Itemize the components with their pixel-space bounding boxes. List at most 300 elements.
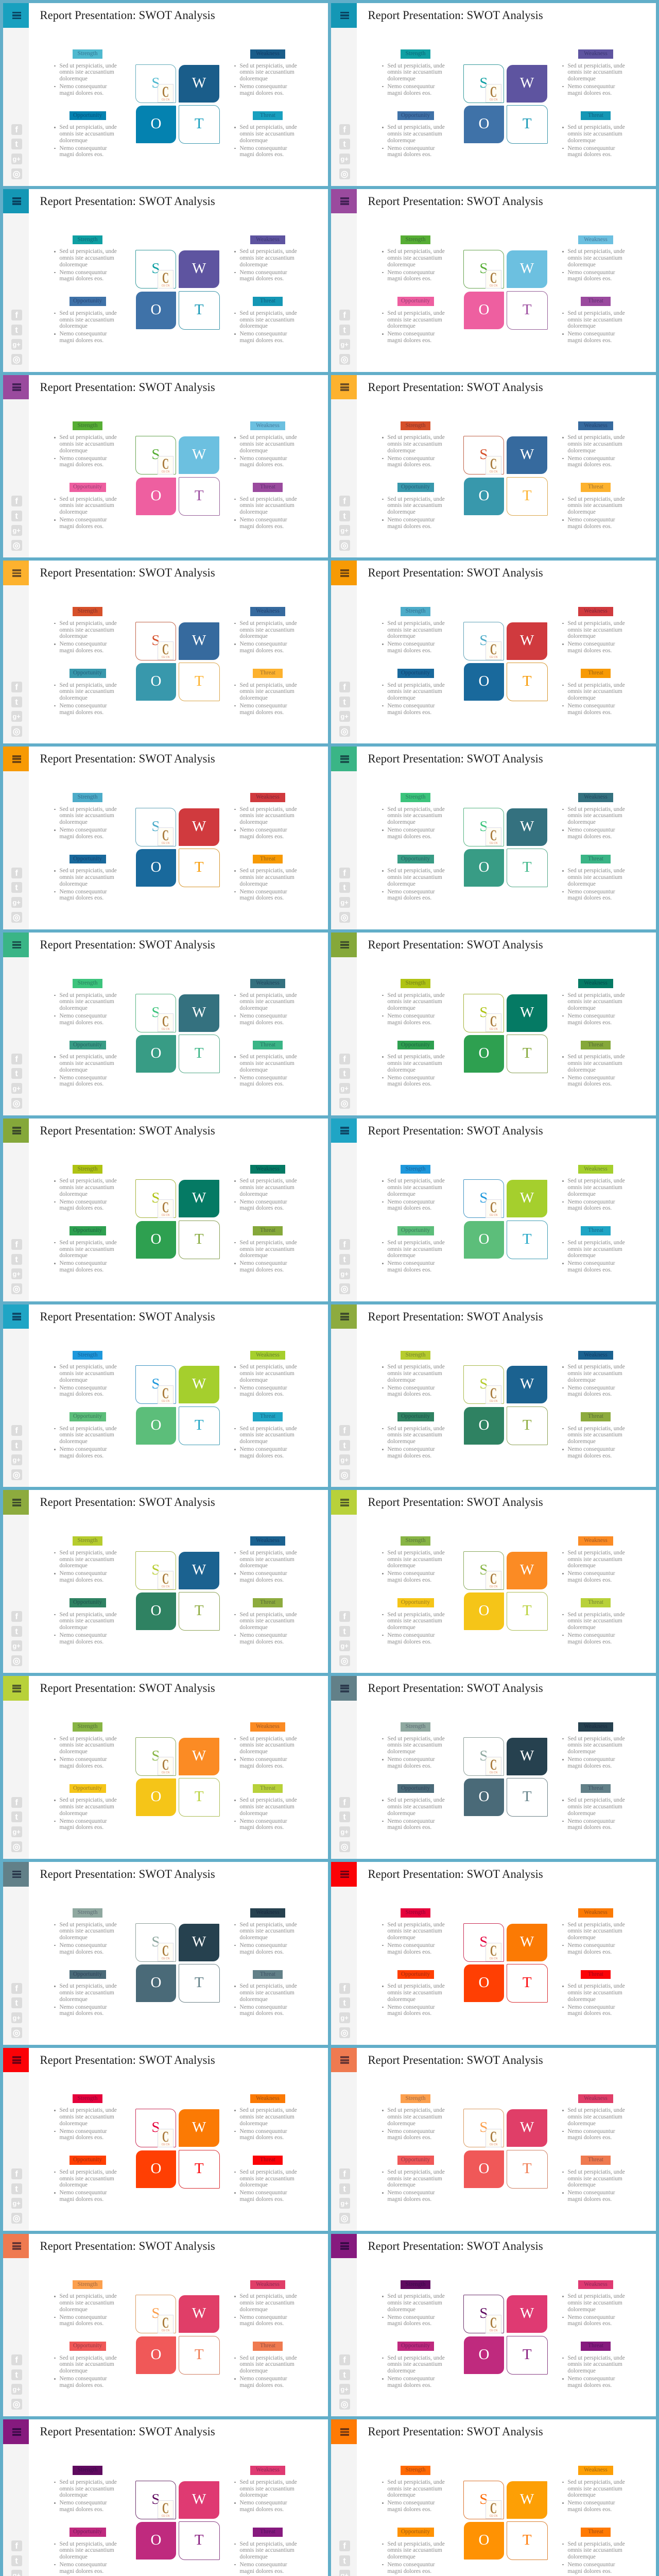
Weakness block: magni dolores eos. <box>240 462 284 468</box>
Weakness block: magni dolores eos. <box>567 648 612 654</box>
Weakness block: Nemo consequuntur <box>567 1942 615 1948</box>
sidebar with menu and social icons: ◎ <box>13 169 21 179</box>
Weakness block: Nemo consequuntur <box>567 455 615 462</box>
Threat block: omnis iste accusantium <box>567 2361 622 2367</box>
Weakness block: Weakness <box>584 980 608 986</box>
Opportunity block <box>377 1598 454 1653</box>
sidebar with menu and social icons <box>3 561 29 743</box>
Threat block <box>558 2156 634 2210</box>
Weakness block: doloremque <box>240 1935 268 1941</box>
panel: SWOT slide 10 <box>331 747 656 929</box>
sidebar with menu and social icons <box>3 1118 29 1301</box>
SWOT tile grid: C <box>162 827 169 844</box>
SWOT tile grid: S <box>479 1190 488 1206</box>
Threat block <box>234 111 297 158</box>
panel: SWOT slide 24 <box>331 2048 656 2231</box>
Weakness block: Sed ut perspiciatis, unde <box>240 992 297 998</box>
SWOT tile grid: S <box>479 260 488 277</box>
SWOT tile grid: CE CN <box>490 98 497 101</box>
Threat block: Sed ut perspiciatis, unde <box>240 1983 297 1989</box>
Opportunity block <box>382 483 445 530</box>
Weakness block: Nemo consequuntur <box>240 641 287 647</box>
sidebar with menu and social icons: t <box>343 139 346 149</box>
SWOT tile grid: CE CN <box>162 284 169 287</box>
Threat block: Nemo consequuntur <box>240 331 287 337</box>
Threat block <box>234 669 297 716</box>
Threat block: Sed ut perspiciatis, unde <box>240 124 297 130</box>
sidebar with menu and social icons: t <box>343 1440 346 1450</box>
sidebar with menu and social icons: ◎ <box>341 1656 349 1666</box>
Threat block: Sed ut perspiciatis, unde <box>240 2355 297 2361</box>
Weakness block: magni dolores eos. <box>240 648 284 654</box>
Strength block: Nemo consequuntur <box>387 455 435 462</box>
Strength block: Nemo consequuntur <box>60 1385 107 1391</box>
Strength block <box>382 49 445 96</box>
Strength block: Strength <box>77 1909 97 1916</box>
Threat block: Threat <box>260 856 275 862</box>
Strength block: omnis iste accusantium <box>60 1184 114 1191</box>
Threat block: Sed ut perspiciatis, unde <box>567 310 625 316</box>
title: Report Presentation: SWOT Analysis <box>40 195 215 208</box>
Opportunity block: doloremque <box>387 2368 415 2374</box>
Opportunity block: omnis iste accusantium <box>387 1804 442 1810</box>
panel: SWOT slide 14 <box>331 1118 656 1301</box>
Threat block: Nemo consequuntur <box>240 1446 287 1452</box>
Opportunity block <box>382 669 445 716</box>
Weakness block: Weakness <box>256 1352 280 1358</box>
Opportunity block <box>377 1970 454 2025</box>
Weakness block: Weakness <box>584 2467 608 2473</box>
Strength block: Strength <box>406 980 425 986</box>
SWOT tile grid: O <box>151 301 161 318</box>
SWOT tile grid: T <box>195 1788 204 1805</box>
Strength block: omnis iste accusantium <box>60 1928 114 1934</box>
Opportunity block: magni dolores eos. <box>60 895 103 901</box>
Strength block: Sed ut perspiciatis, unde <box>60 2293 117 2299</box>
Threat block: Nemo consequuntur <box>567 1446 615 1452</box>
Weakness block: Sed ut perspiciatis, unde <box>240 1922 297 1928</box>
Opportunity block <box>377 1041 454 1095</box>
Weakness block: omnis iste accusantium <box>567 1742 622 1748</box>
Weakness block: doloremque <box>240 633 268 639</box>
sidebar with menu and social icons: g+ <box>340 1270 349 1278</box>
Strength block: magni dolores eos. <box>387 1205 431 1211</box>
Opportunity block: doloremque <box>387 138 415 144</box>
Strength block: omnis iste accusantium <box>387 998 442 1005</box>
Weakness block <box>558 2466 634 2520</box>
SWOT tile grid: T <box>195 2532 204 2548</box>
Opportunity block <box>54 297 117 344</box>
Strength block: omnis iste accusantium <box>60 255 114 261</box>
Threat block <box>230 1041 306 1095</box>
Strength block: doloremque <box>60 447 88 453</box>
sidebar with menu and social icons <box>331 933 357 1115</box>
Opportunity block: Sed ut perspiciatis, unde <box>60 682 117 688</box>
Strength block: Sed ut perspiciatis, unde <box>60 63 117 69</box>
sidebar with menu and social icons: t <box>15 511 18 521</box>
Opportunity block: Nemo consequuntur <box>60 331 107 337</box>
SWOT tile grid: S <box>151 1562 160 1578</box>
Strength block: omnis iste accusantium <box>387 627 442 633</box>
Threat block: doloremque <box>240 1252 268 1259</box>
Threat block: magni dolores eos. <box>567 523 612 530</box>
Threat block: doloremque <box>240 1810 268 1817</box>
Threat block: Threat <box>588 298 603 304</box>
Weakness block <box>562 235 625 282</box>
Threat block: doloremque <box>240 1996 268 2003</box>
SWOT tile grid: T <box>195 2160 204 2177</box>
Weakness block: Weakness <box>584 2281 608 2287</box>
sidebar with menu and social icons: f <box>15 2169 18 2179</box>
Threat block: omnis iste accusantium <box>240 1060 294 1066</box>
Opportunity block: omnis iste accusantium <box>60 1618 114 1624</box>
Threat block: Sed ut perspiciatis, unde <box>567 1240 625 1246</box>
SWOT tile grid: O <box>151 859 161 875</box>
sidebar with menu and social icons <box>331 1862 357 2045</box>
Opportunity block: doloremque <box>387 323 415 329</box>
SWOT tile grid: O <box>151 487 161 504</box>
Threat block: magni dolores eos. <box>240 709 284 716</box>
Threat block: Nemo consequuntur <box>567 517 615 523</box>
Weakness block: omnis iste accusantium <box>240 998 294 1005</box>
Weakness block <box>558 1351 634 1405</box>
sidebar with menu and social icons: f <box>343 1054 346 1064</box>
Weakness block: magni dolores eos. <box>240 2506 284 2513</box>
Opportunity block: magni dolores eos. <box>60 1453 103 1459</box>
SWOT tile grid: C <box>490 1199 497 1216</box>
Threat block: Nemo consequuntur <box>567 1818 615 1824</box>
Strength block: magni dolores eos. <box>60 1205 103 1211</box>
Threat block <box>230 1784 306 1839</box>
Strength block: Strength <box>406 422 425 429</box>
Threat block: Threat <box>588 856 603 862</box>
Weakness block: magni dolores eos. <box>567 1763 612 1769</box>
SWOT tile grid <box>135 2480 220 2561</box>
Weakness block: magni dolores eos. <box>567 1020 612 1026</box>
SWOT tile grid: S <box>151 818 160 835</box>
SWOT tile grid: T <box>523 1231 532 1247</box>
SWOT tile grid: CE CN <box>162 2143 169 2146</box>
SWOT tile grid: CE CN <box>162 1957 169 1960</box>
Strength block: omnis iste accusantium <box>60 69 114 75</box>
panel: SWOT slide 22 <box>331 1862 656 2045</box>
Threat block: Threat <box>260 2343 275 2349</box>
Opportunity block: Opportunity <box>73 856 102 862</box>
SWOT tile grid: T <box>523 673 532 689</box>
SWOT tile grid: S <box>151 1376 160 1392</box>
sidebar with menu and social icons <box>3 1676 29 1859</box>
sidebar with menu and social icons: ◎ <box>341 2028 349 2038</box>
SWOT tile grid <box>463 1179 548 1260</box>
Weakness block: omnis iste accusantium <box>240 69 294 75</box>
Strength block: Sed ut perspiciatis, unde <box>387 434 445 440</box>
sidebar with menu and social icons: t <box>15 1255 18 1264</box>
SWOT tile grid: W <box>192 446 206 463</box>
Weakness block: Sed ut perspiciatis, unde <box>240 1550 297 1556</box>
sidebar with menu and social icons: g+ <box>340 527 349 534</box>
Opportunity block: Opportunity <box>401 112 430 118</box>
panel: SWOT slide 6 <box>331 375 656 557</box>
Strength block: Strength <box>406 608 425 614</box>
Opportunity block: Nemo consequuntur <box>60 889 107 895</box>
SWOT tile grid: CE CN <box>490 842 497 845</box>
Opportunity block <box>49 1970 126 2025</box>
Weakness block: omnis iste accusantium <box>567 441 622 447</box>
SWOT tile grid: T <box>195 487 204 504</box>
Opportunity block: magni dolores eos. <box>60 523 103 530</box>
sidebar with menu and social icons: g+ <box>12 1270 21 1278</box>
Weakness block: doloremque <box>567 633 596 639</box>
sidebar with menu and social icons: ◎ <box>341 1470 349 1480</box>
Strength block: magni dolores eos. <box>60 2506 103 2513</box>
sidebar with menu and social icons: ◎ <box>13 2213 21 2223</box>
Weakness block <box>230 1536 306 1591</box>
Weakness block: doloremque <box>567 2492 596 2498</box>
Threat block <box>230 1226 306 1281</box>
Threat block <box>558 1970 634 2025</box>
Strength block: doloremque <box>387 1935 415 1941</box>
SWOT tile grid: CE CN <box>490 1400 497 1403</box>
Opportunity block: magni dolores eos. <box>60 2196 103 2202</box>
Weakness block: Nemo consequuntur <box>567 1199 615 1205</box>
Opportunity block: doloremque <box>60 1067 88 1073</box>
Threat block: doloremque <box>240 2368 268 2374</box>
Weakness block <box>558 793 634 848</box>
Threat block: Nemo consequuntur <box>240 889 287 895</box>
Opportunity block <box>49 1784 126 1839</box>
Strength block: doloremque <box>60 1005 88 1011</box>
SWOT tile grid: C <box>162 2315 169 2331</box>
sidebar with menu and social icons <box>331 1490 357 1673</box>
sidebar with menu and social icons <box>3 3 29 186</box>
Weakness block: magni dolores eos. <box>567 2506 612 2513</box>
Strength block: Nemo consequuntur <box>387 2128 435 2134</box>
Strength block <box>382 421 445 468</box>
Threat block: Sed ut perspiciatis, unde <box>567 2541 625 2547</box>
sidebar with menu and social icons <box>331 2234 357 2416</box>
Weakness block: Nemo consequuntur <box>567 2128 615 2134</box>
sidebar with menu and social icons <box>331 1118 357 1301</box>
Opportunity block: omnis iste accusantium <box>387 1246 442 1252</box>
sidebar with menu and social icons <box>3 1304 29 1487</box>
Weakness block: doloremque <box>240 2306 268 2312</box>
sidebar with menu and social icons: f <box>15 868 18 878</box>
Threat block: Threat <box>260 1971 275 1977</box>
sidebar with menu and social icons: f <box>15 310 18 320</box>
Opportunity block: doloremque <box>387 1810 415 1817</box>
Strength block <box>49 1351 126 1405</box>
Opportunity block: Sed ut perspiciatis, unde <box>60 1612 117 1618</box>
Opportunity block <box>54 483 117 530</box>
Strength block: doloremque <box>387 1749 415 1755</box>
Opportunity block: Opportunity <box>401 2529 430 2535</box>
Strength block: doloremque <box>60 2492 88 2498</box>
Strength block <box>49 1908 126 1963</box>
Weakness block: Weakness <box>256 422 280 429</box>
Weakness block: Sed ut perspiciatis, unde <box>240 1364 297 1370</box>
Threat block: omnis iste accusantium <box>567 1432 622 1438</box>
SWOT tile grid <box>463 436 548 516</box>
title: Report Presentation: SWOT Analysis <box>368 752 543 765</box>
sidebar with menu and social icons: ◎ <box>13 912 21 922</box>
Opportunity block <box>49 2156 126 2210</box>
SWOT tile grid: CE CN <box>490 284 497 287</box>
SWOT tile grid: C <box>490 270 497 286</box>
SWOT tile grid: T <box>195 859 204 875</box>
SWOT tile grid <box>463 993 548 1074</box>
sidebar with menu and social icons <box>3 933 29 1115</box>
Opportunity block: doloremque <box>60 1996 88 2003</box>
title: Report Presentation: SWOT Analysis <box>40 2240 215 2252</box>
Strength block: Strength <box>406 794 425 800</box>
SWOT tile grid: S <box>151 1748 160 1764</box>
Strength block: Nemo consequuntur <box>60 2500 107 2506</box>
Threat block: doloremque <box>240 509 268 515</box>
Opportunity block <box>54 669 117 716</box>
Strength block: Strength <box>77 236 97 243</box>
Threat block: magni dolores eos. <box>567 1824 612 1831</box>
Opportunity block: omnis iste accusantium <box>60 2361 114 2367</box>
Weakness block <box>562 421 625 468</box>
Opportunity block: doloremque <box>60 1810 88 1817</box>
Strength block: magni dolores eos. <box>387 1763 431 1769</box>
Threat block: Nemo consequuntur <box>567 1260 615 1266</box>
SWOT tile grid: C <box>162 641 169 658</box>
Threat block: Nemo consequuntur <box>567 2376 615 2382</box>
Weakness block: Nemo consequuntur <box>567 269 615 276</box>
Strength block: Strength <box>406 2281 425 2287</box>
Strength block: omnis iste accusantium <box>60 998 114 1005</box>
Weakness block: Nemo consequuntur <box>567 2500 615 2506</box>
Weakness block: magni dolores eos. <box>240 90 284 96</box>
Weakness block: Sed ut perspiciatis, unde <box>567 1736 625 1742</box>
Strength block: magni dolores eos. <box>60 1949 103 1955</box>
SWOT tile grid: O <box>479 1045 489 1061</box>
Strength block: Sed ut perspiciatis, unde <box>60 1178 117 1184</box>
Strength block: Strength <box>77 1352 97 1358</box>
panel: SWOT slide 12 <box>331 933 656 1115</box>
sidebar with menu and social icons <box>331 1676 357 1859</box>
Weakness block: omnis iste accusantium <box>567 69 622 75</box>
sidebar with menu and social icons: f <box>15 125 18 134</box>
Strength block: doloremque <box>387 2492 415 2498</box>
Weakness block: Nemo consequuntur <box>240 2314 287 2320</box>
Strength block: doloremque <box>387 1005 415 1011</box>
Weakness block: omnis iste accusantium <box>240 1556 294 1563</box>
Opportunity block: Opportunity <box>73 670 102 676</box>
SWOT tile grid: T <box>195 1417 204 1433</box>
SWOT tile grid <box>463 1737 548 1817</box>
Opportunity block: Nemo consequuntur <box>60 1632 107 1638</box>
Threat block: doloremque <box>567 1067 596 1073</box>
Strength block: magni dolores eos. <box>60 276 103 282</box>
SWOT tile grid: T <box>195 115 204 132</box>
Weakness block: omnis iste accusantium <box>240 441 294 447</box>
Threat block: Threat <box>588 112 603 118</box>
Strength block: omnis iste accusantium <box>387 1370 442 1377</box>
Weakness block: Sed ut perspiciatis, unde <box>240 63 297 69</box>
Strength block: Strength <box>77 794 97 800</box>
Opportunity block: Sed ut perspiciatis, unde <box>387 1240 445 1246</box>
Strength block <box>49 793 126 848</box>
sidebar with menu and social icons: g+ <box>12 2014 21 2022</box>
sidebar with menu and social icons: g+ <box>12 899 21 906</box>
Threat block: Threat <box>260 298 275 304</box>
panel: SWOT slide 13 <box>3 1118 328 1301</box>
SWOT tile grid: S <box>479 818 488 835</box>
sidebar with menu and social icons: t <box>15 139 18 149</box>
Strength block: magni dolores eos. <box>60 462 103 468</box>
Threat block <box>230 855 306 909</box>
Threat block: doloremque <box>567 2554 596 2560</box>
Opportunity block: Nemo consequuntur <box>387 331 435 337</box>
Threat block <box>230 2528 306 2576</box>
Threat block <box>230 1598 306 1653</box>
sidebar with menu and social icons: g+ <box>340 1828 349 1836</box>
SWOT tile grid: T <box>195 1231 204 1247</box>
SWOT tile grid: O <box>479 301 489 318</box>
Weakness block: doloremque <box>240 1563 268 1569</box>
SWOT tile grid <box>463 2480 548 2561</box>
Opportunity block: magni dolores eos. <box>60 1824 103 1831</box>
Weakness block: omnis iste accusantium <box>240 1928 294 1934</box>
Opportunity block: magni dolores eos. <box>387 1267 431 1273</box>
Weakness block: doloremque <box>567 1005 596 1011</box>
Strength block: magni dolores eos. <box>60 1577 103 1583</box>
Threat block: magni dolores eos. <box>567 2196 612 2202</box>
Threat block: omnis iste accusantium <box>240 1804 294 1810</box>
SWOT tile grid: C <box>162 456 169 472</box>
Opportunity block: omnis iste accusantium <box>387 2176 442 2182</box>
SWOT tile grid: O <box>479 1974 489 1991</box>
SWOT tile grid: C <box>490 456 497 472</box>
Weakness block: magni dolores eos. <box>567 2134 612 2141</box>
SWOT tile grid: S <box>479 2305 488 2321</box>
SWOT tile grid: W <box>192 260 206 277</box>
sidebar with menu and social icons: f <box>15 496 18 506</box>
Strength block: magni dolores eos. <box>60 90 103 96</box>
Threat block: Nemo consequuntur <box>567 145 615 151</box>
Opportunity block: Nemo consequuntur <box>387 1075 435 1081</box>
SWOT tile grid: W <box>520 632 534 649</box>
Threat block: omnis iste accusantium <box>567 688 622 694</box>
Threat block: Threat <box>260 1785 275 1791</box>
SWOT tile grid: W <box>520 1933 534 1950</box>
Threat block: doloremque <box>567 323 596 329</box>
Opportunity block: Opportunity <box>401 1971 430 1977</box>
Strength block: doloremque <box>387 1191 415 1197</box>
Strength block: Nemo consequuntur <box>60 455 107 462</box>
Weakness block: omnis iste accusantium <box>567 255 622 261</box>
Opportunity block: Nemo consequuntur <box>60 1818 107 1824</box>
Threat block: Sed ut perspiciatis, unde <box>240 2541 297 2547</box>
Weakness block: magni dolores eos. <box>567 90 612 96</box>
SWOT tile grid: T <box>523 859 532 875</box>
SWOT tile grid: CE CN <box>490 2515 497 2518</box>
Threat block: Threat <box>260 1413 275 1419</box>
Weakness block: Weakness <box>256 2095 280 2102</box>
Threat block: magni dolores eos. <box>240 337 284 344</box>
Strength block: Sed ut perspiciatis, unde <box>60 1922 117 1928</box>
Weakness block: Sed ut perspiciatis, unde <box>567 63 625 69</box>
Threat block: omnis iste accusantium <box>567 1618 622 1624</box>
Threat block: magni dolores eos. <box>240 1453 284 1459</box>
Opportunity block: omnis iste accusantium <box>387 2361 442 2367</box>
Strength block: magni dolores eos. <box>60 834 103 840</box>
Strength block <box>49 2094 126 2149</box>
SWOT tile grid: O <box>479 1788 489 1805</box>
sidebar with menu and social icons: t <box>343 2556 346 2566</box>
